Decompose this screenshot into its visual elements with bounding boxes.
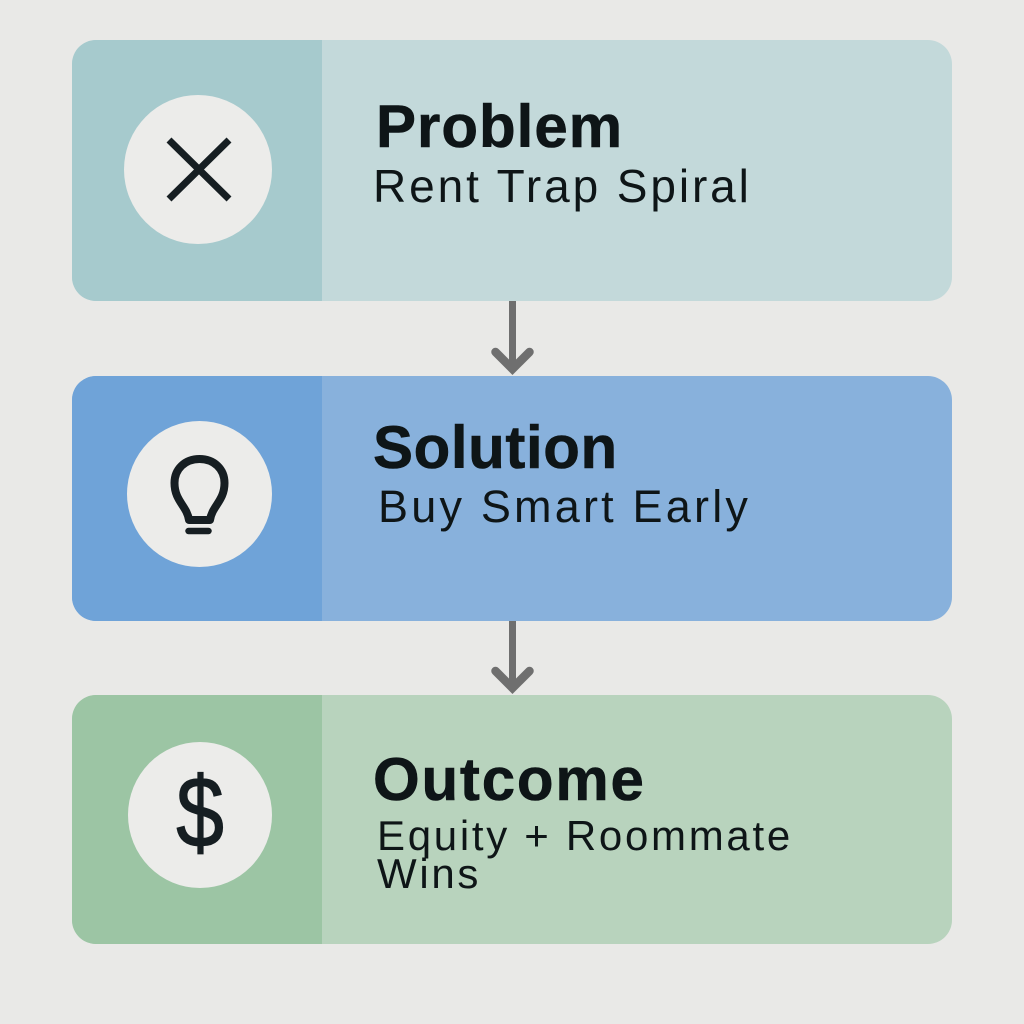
outcome text xyxy=(377,812,793,897)
solution icon column xyxy=(72,376,322,621)
problem heading: Problem xyxy=(376,93,623,160)
problem text: Rent Trap Spiral xyxy=(373,160,752,212)
arrow: problem to solution xyxy=(491,301,534,375)
outcome icon column xyxy=(72,695,322,944)
panel: solution xyxy=(72,376,952,621)
solution text: Buy Smart Early xyxy=(378,481,751,532)
problem icon column xyxy=(72,40,322,301)
panel: outcome xyxy=(72,695,952,944)
outcome heading: Outcome xyxy=(373,746,646,813)
icon: dollar xyxy=(128,742,272,888)
arrow: solution to outcome xyxy=(491,621,534,694)
panel: problem xyxy=(72,40,952,301)
icon: cross xyxy=(124,95,272,244)
outcome text: Wins xyxy=(377,850,481,897)
icon: light bulb xyxy=(127,421,272,567)
outcome text: Equity + Roommate xyxy=(377,812,793,859)
solution heading: Solution xyxy=(373,414,618,481)
dollar sign: $ xyxy=(176,757,224,869)
